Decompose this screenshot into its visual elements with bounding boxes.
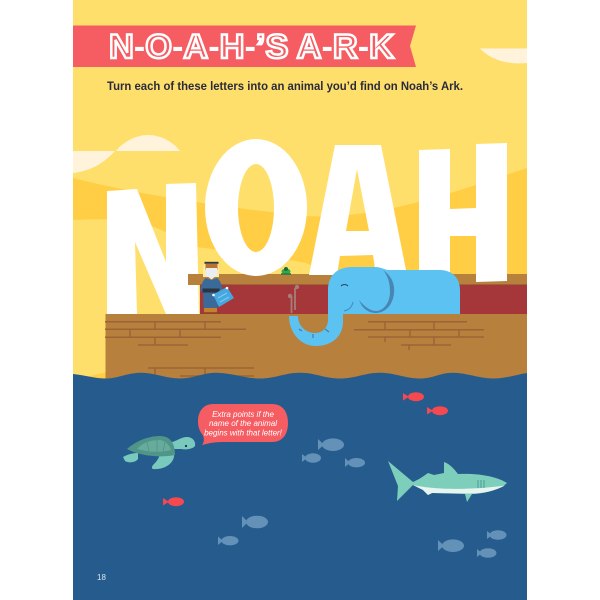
elephant ear <box>359 270 394 313</box>
blue fish 5 <box>487 530 506 540</box>
icon: turtle <box>123 436 195 469</box>
cloud: top right <box>480 48 527 63</box>
blue fish 7 <box>242 516 268 528</box>
big letter O <box>205 139 307 276</box>
elephant eye <box>341 284 348 286</box>
blue fish 1 <box>318 438 344 451</box>
hull planks right <box>354 322 484 350</box>
panel: sky background <box>73 0 527 216</box>
cloud: left <box>73 135 180 173</box>
instruction text: Turn each of these letters into an animal you’d find on Noah’s Ark. <box>107 79 463 93</box>
blue fish 8 <box>218 536 238 545</box>
blue fish 4 <box>438 539 464 552</box>
elephant trunk <box>289 312 343 346</box>
icon: water spout from trunk <box>288 285 299 313</box>
school of blue fish <box>218 438 506 558</box>
icon: Noah's blue tablet <box>212 287 234 307</box>
ark hull <box>105 314 527 385</box>
dark sand hills <box>73 168 527 380</box>
icon: red fish 2 <box>427 406 448 415</box>
bubble text: begins with that letter! <box>204 428 283 438</box>
light sand hill <box>73 219 330 380</box>
icon: frog <box>281 267 291 274</box>
icon: Noah figure <box>200 262 223 313</box>
icon: red fish 1 <box>403 392 424 401</box>
bubble text: Extra points if the <box>212 410 274 419</box>
blue fish 6 <box>477 548 496 558</box>
icon: red fish 3 <box>163 497 184 506</box>
banner title: N-O-A-H-’S A-R-K <box>109 28 394 66</box>
speech bubble <box>198 404 288 445</box>
hull planks left <box>105 322 254 376</box>
ark upper beam <box>188 274 527 286</box>
blue fish 2 <box>302 453 321 463</box>
sea <box>73 373 527 600</box>
big letter H <box>419 143 507 282</box>
elephant trunk creases <box>299 329 329 338</box>
big letter A <box>309 145 407 275</box>
icon: elephant <box>289 267 460 346</box>
elephant mouth <box>344 302 353 311</box>
title banner <box>73 26 416 67</box>
page number: 18 <box>97 573 106 582</box>
icon: shark <box>388 461 507 502</box>
ark red wall <box>200 285 527 315</box>
big letter N <box>107 183 199 314</box>
blue fish 3 <box>345 458 365 467</box>
bubble text: name of the animal <box>209 419 277 428</box>
